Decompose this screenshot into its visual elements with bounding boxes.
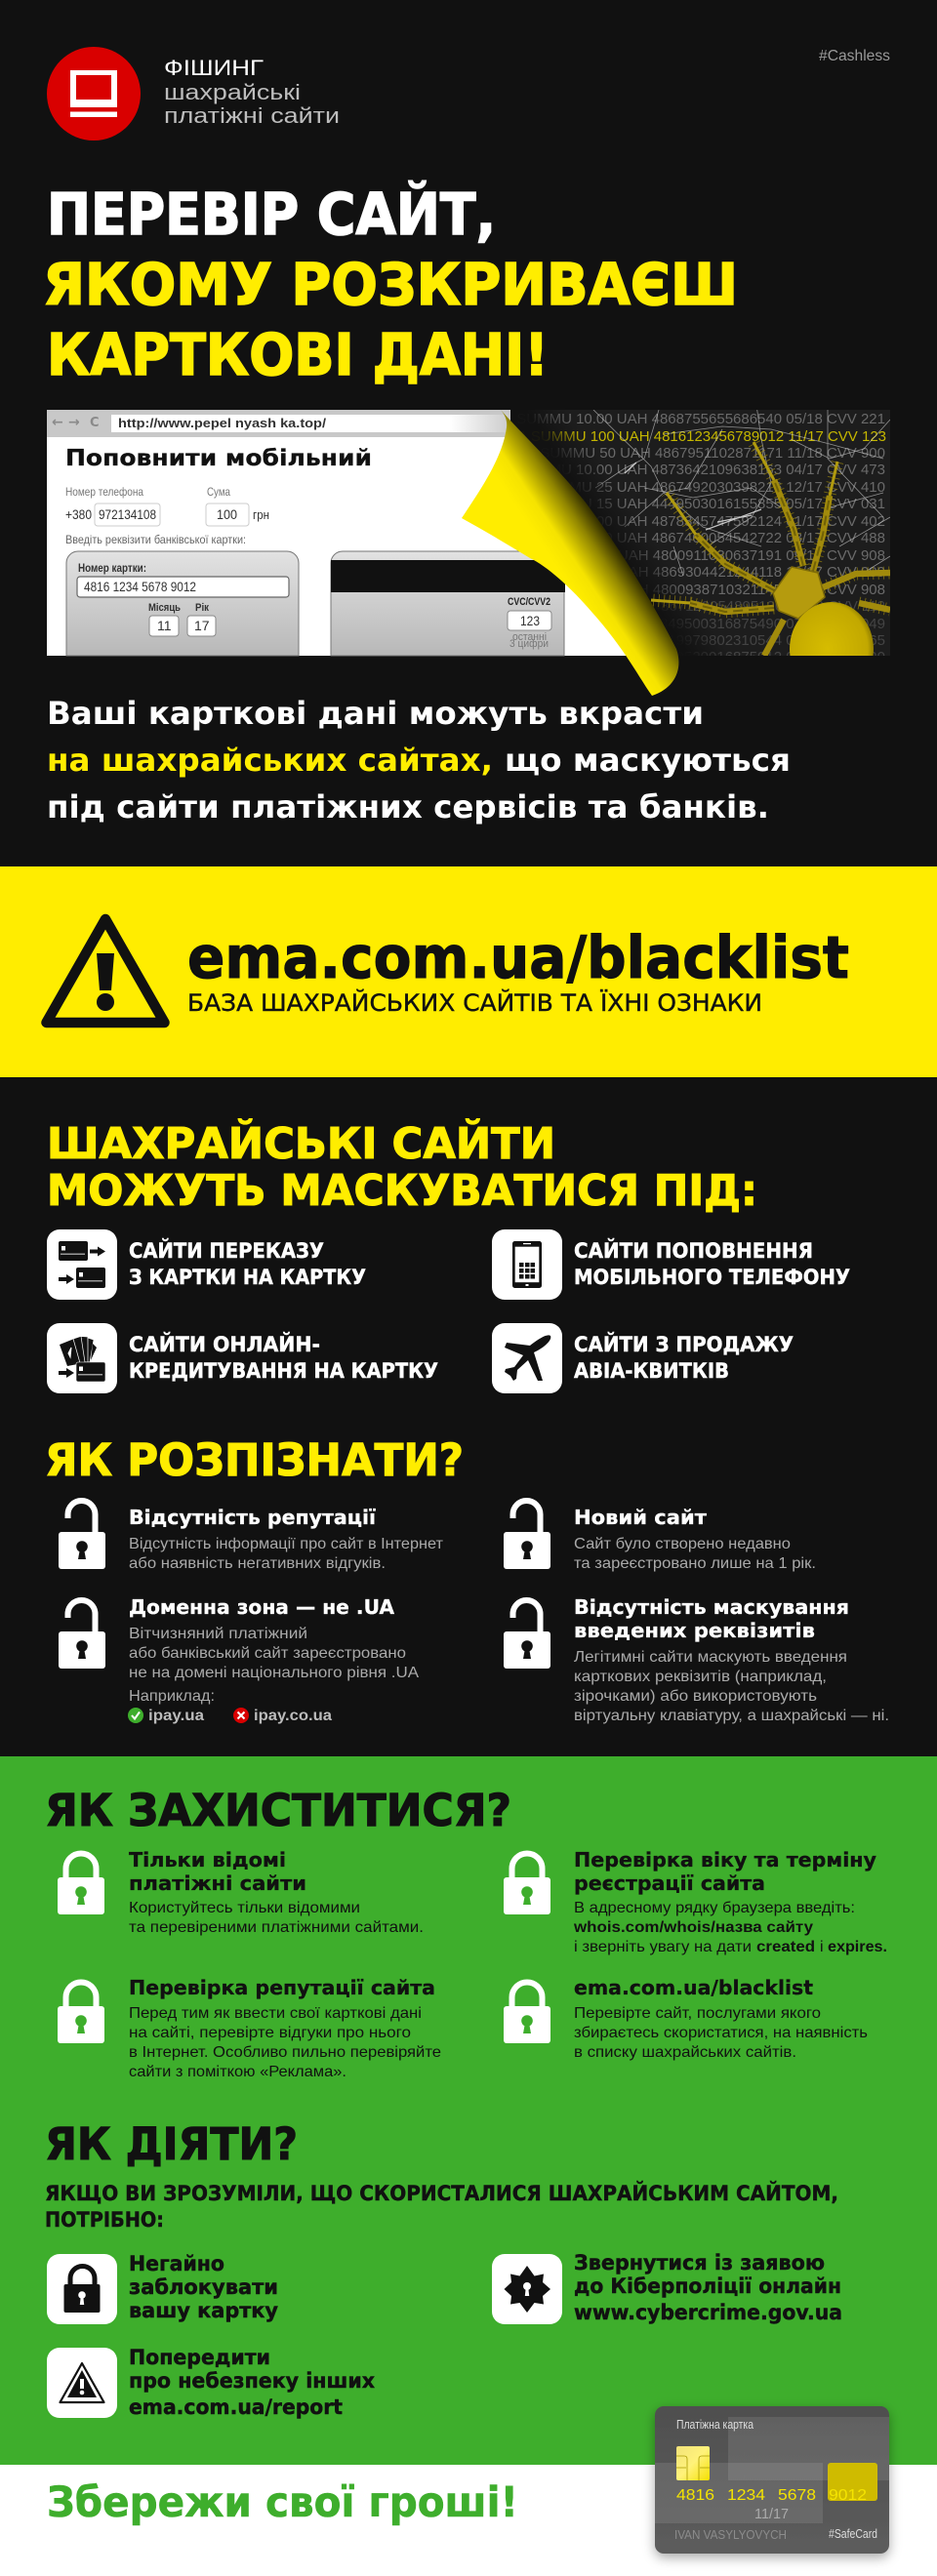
stolen card data rows: SUMMU 15 UAH 4800520016875012 04/18 CVV 190 — [537, 649, 885, 665]
phone and amount fields — [65, 485, 269, 546]
text — [574, 1595, 889, 1724]
item: mobile top-up sites — [492, 1229, 850, 1300]
item: warn others — [47, 2346, 375, 2419]
spider — [650, 440, 890, 656]
subheading: ПОТРІБНО: — [45, 2208, 164, 2232]
header label: ФІШИНГ — [164, 56, 264, 80]
text: введених реквізитів — [574, 1619, 815, 1642]
card front form: 11 — [157, 618, 172, 633]
illustration: payment card: #SafeCard — [829, 2526, 877, 2541]
stolen card data rows: SUMMU 10 UAH 4800938710321145 06/17 CVV 908 — [538, 582, 885, 598]
item: cyberpolice — [492, 2251, 842, 2324]
icon: card transfer — [47, 1229, 117, 1300]
text: Відсутність маскування — [574, 1595, 849, 1619]
card front form — [66, 551, 299, 656]
text: заблокувати — [129, 2275, 278, 2299]
item: check reputation — [58, 1976, 441, 2080]
label — [574, 1238, 850, 1289]
text — [574, 1976, 868, 2061]
phone and amount fields: Номер телефона — [65, 485, 143, 499]
stolen card data rows: PLATA SUMMU 50 UAH 4867951102871171 11/18 CVV 900 — [493, 445, 885, 462]
text: сайти з поміткою «Реклама». — [129, 2064, 346, 2080]
yellow page curl — [462, 410, 678, 696]
card front form: Номер картки: — [78, 561, 146, 575]
label: САЙТИ ПЕРЕКАЗУ — [129, 1238, 324, 1263]
icon: cash fan and card — [47, 1323, 117, 1393]
panel: green section — [0, 1756, 937, 2465]
text: Попередити — [129, 2346, 270, 2369]
phone and amount fields: +380 — [65, 506, 92, 522]
text: Перевірка репутації сайта — [129, 1976, 435, 1999]
text: збираєтесь скористатися, на наявність — [574, 2025, 868, 2041]
fake site page — [47, 410, 649, 656]
text: та перевіреними платіжними сайтами. — [129, 1919, 424, 1936]
example: good domain — [128, 1708, 204, 1724]
icon: open lock — [59, 1600, 105, 1669]
browser bar: C — [90, 416, 100, 430]
text: в списку шахрайських сайтів. — [574, 2044, 796, 2061]
text: Перед тим як ввести свої карткові дані — [129, 2005, 422, 2022]
text: в Інтернет. Особливо пильно перевіряйте — [129, 2044, 441, 2061]
text: Користуйтесь тільки відомими — [129, 1900, 360, 1916]
phone and amount fields: Введіть реквізити банківської картки: — [65, 533, 246, 546]
illustration: payment card: 11/17 — [754, 2506, 789, 2522]
text — [129, 1848, 424, 1936]
text: Звернутися із заявою — [574, 2251, 825, 2274]
text: ema.com.ua/report — [129, 2395, 343, 2419]
header — [47, 47, 890, 141]
text: до Кіберполіції онлайн — [574, 2274, 841, 2298]
stolen card data rows: PLATA SUMMU 10.00 UAH 4868755655686540 05/18 CVV 221 — [469, 411, 885, 427]
card front form: 4816 1234 5678 9012 — [84, 579, 196, 594]
browser bar — [47, 410, 510, 437]
stolen card data rows: SUMMU 20 UAH 4867400054542722 08/17 CVV 488 — [537, 530, 885, 546]
item: online credit sites — [47, 1323, 438, 1393]
text: whois.com/whois/назва сайту — [573, 1919, 813, 1936]
label — [574, 1332, 794, 1383]
title: КАРТКОВІ ДАНІ! — [47, 321, 549, 388]
text: created — [756, 1939, 815, 1955]
stolen card data rows: PLATA SUMMU 100 UAH 4816123456789012 11/17 CVV 123 — [483, 428, 886, 445]
card back form — [331, 551, 565, 656]
text — [129, 1976, 441, 2080]
phone and amount fields: грн — [253, 507, 269, 522]
card back form: 123 — [520, 613, 540, 628]
card back form: останні — [512, 631, 547, 643]
text — [574, 1506, 816, 1572]
banner url: ema.com.ua/blacklist — [187, 924, 849, 992]
icon: open lock — [504, 1501, 550, 1569]
spider web — [593, 405, 890, 576]
text: Перевірка віку та терміну — [574, 1848, 876, 1872]
card front form: Рік — [195, 602, 209, 614]
text: вашу картку — [129, 2299, 278, 2322]
panel: yellow blacklist banner — [0, 866, 937, 1077]
text: та зареєстровано лише на 1 рік. — [574, 1555, 816, 1572]
panel: white footer — [0, 2465, 937, 2576]
intro paragraph: Ваші карткові дані можуть вкрасти — [47, 695, 704, 732]
card back form: CVC/CVV2 — [508, 596, 550, 608]
stolen card data rows: SUMMU 10.00 UAH 4873642109638163 04/17 CVV 473 — [516, 462, 885, 478]
banner subtitle: БАЗА ШАХРАЙСЬКИХ САЙТІВ ТА ЇХНІ ОЗНАКИ — [187, 988, 762, 1017]
item: air ticket sites — [492, 1323, 794, 1393]
icon: open lock — [504, 1600, 550, 1669]
label — [129, 1332, 438, 1383]
label: АВІА-КВИТКІВ — [574, 1359, 729, 1383]
text: зірочками) або використовують — [574, 1688, 817, 1705]
stolen card data rows: SUMMU 30 UAH 4800911030637191 09/17 CVV 908 — [538, 547, 885, 564]
example: bad domain: ipay.co.ua — [254, 1708, 332, 1724]
subheading — [45, 2181, 838, 2232]
phone and amount fields: 100 — [217, 506, 237, 522]
item: new site — [504, 1501, 816, 1572]
heading: what to do: ЯК ДІЯТИ? — [45, 2118, 298, 2170]
icon: warning triangle — [47, 2348, 117, 2418]
text: віртуальну клавіатуру, а шахрайські — ні. — [574, 1708, 889, 1724]
footer slogan: Збережи свої гроші! — [47, 2478, 518, 2527]
item: transfer sites — [47, 1229, 366, 1300]
stolen card data rows — [522, 413, 886, 656]
hologram — [828, 2463, 877, 2501]
stolen card data rows: SUMMU 30 UAH 4819979802310544 03/18 CVV 865 — [537, 632, 885, 649]
label: САЙТИ З ПРОДАЖУ — [574, 1332, 794, 1356]
text: Тільки відомі — [129, 1848, 286, 1872]
intro paragraph: під сайти платіжних сервісів та банків. — [47, 788, 769, 825]
text: Новий сайт — [574, 1506, 707, 1529]
text — [129, 1506, 444, 1572]
stolen card data rows: SUMMU 25 UAH 4867492030398216 12/17 CVV 410 — [537, 479, 885, 496]
text: на сайті, перевірте відгуки про нього — [129, 2025, 411, 2041]
text: Доменна зона — не .UA — [129, 1595, 395, 1619]
label: САЙТИ ОНЛАЙН- — [129, 1332, 320, 1356]
icon: red logo with monitor — [47, 47, 141, 141]
text — [129, 2252, 278, 2322]
header label: платіжні сайти — [164, 103, 340, 128]
text: Наприклад: — [129, 1688, 215, 1705]
heading: how to protect: ЯК ЗАХИСТИТИСЯ? — [45, 1785, 511, 1836]
stolen card data rows: SUMMU 400 UAH 4878345747592124 01/17 CVV 402 — [529, 513, 885, 530]
label: САЙТИ ПОПОВНЕННЯ — [574, 1238, 813, 1263]
card number: 4816 — [676, 2487, 714, 2504]
icon: open lock — [59, 1501, 105, 1569]
text: expires. — [828, 1939, 887, 1955]
card front form: Місяць — [148, 602, 181, 614]
text: В адресному рядку браузера введіть: — [574, 1900, 855, 1916]
text: про небезпеку інших — [129, 2369, 375, 2393]
icon: plane — [492, 1323, 562, 1393]
heading: how to recognise: ЯК РОЗПІЗНАТИ? — [45, 1434, 464, 1486]
title: ПЕРЕВІР САЙТ, — [47, 181, 496, 248]
text — [573, 1848, 887, 1955]
text: і зверніть увагу на дати — [574, 1939, 752, 1955]
stolen card data rows: SUMMU 15 UAH 4449503016155855 05/17 CVV 031 — [537, 496, 885, 512]
icon: closed lock — [58, 1854, 104, 1914]
phone and amount fields: 972134108 — [99, 506, 156, 522]
title — [43, 181, 738, 388]
heading: masquerade: МОЖУТЬ МАСКУВАТИСЯ ПІД: — [47, 1166, 757, 1216]
header label: шахрайські — [164, 80, 301, 104]
chip — [676, 2446, 710, 2480]
browser bar: ← — [52, 415, 63, 430]
label — [129, 1238, 366, 1289]
label: МОБІЛЬНОГО ТЕЛЕФОНУ — [574, 1266, 850, 1289]
form heading: Поповнити мобільний — [65, 446, 372, 471]
text: ema.com.ua/blacklist — [574, 1976, 813, 1999]
intro paragraph — [47, 695, 791, 825]
item: no masking — [504, 1595, 889, 1724]
intro paragraph: що маскуються — [505, 742, 791, 779]
card front form: 17 — [194, 618, 210, 633]
text: реєстрації сайта — [574, 1872, 765, 1895]
header label — [164, 56, 340, 128]
item: check age — [504, 1848, 887, 1955]
card number: 1234 — [727, 2487, 765, 2504]
text: і — [820, 1939, 824, 1955]
icon: black lock — [47, 2254, 117, 2324]
intro paragraph: на шахрайських сайтах, — [47, 742, 493, 779]
text — [574, 2251, 842, 2324]
item: block card — [47, 2252, 278, 2324]
icon: phone — [492, 1229, 562, 1300]
text: карткових реквізитів (наприклад, — [574, 1669, 827, 1685]
text: Легітимні сайти маскують введення — [574, 1649, 847, 1666]
text: Відсутність інформації про сайт в Інтернет — [129, 1536, 444, 1552]
label: З КАРТКИ НА КАРТКУ — [129, 1266, 366, 1289]
text — [129, 2346, 375, 2419]
item: blacklist check — [504, 1976, 868, 2061]
item: no reputation — [59, 1501, 444, 1572]
icon: police star — [492, 2254, 562, 2324]
card number: 5678 — [778, 2487, 816, 2504]
item: domain zone — [59, 1595, 419, 1724]
example: good domain: ipay.ua — [148, 1708, 204, 1724]
illustration: phishing site with page curl and spider — [47, 405, 890, 696]
card back form: 3 цифри — [509, 638, 549, 650]
stolen card data rows: SUMMU 10 UAH 4849500316875490 07/17 CVV 049 — [537, 616, 885, 632]
phone and amount fields: Сума — [207, 485, 230, 499]
heading: masquerade — [47, 1117, 757, 1216]
browser bar: http://www.pepel nyash ka.top/ — [118, 416, 326, 430]
illustration: payment card — [655, 2406, 889, 2554]
card number — [676, 2487, 867, 2504]
title: ЯКОМУ РОЗКРИВАЄШ — [43, 251, 738, 318]
text: www.cybercrime.gov.ua — [574, 2301, 842, 2324]
text: Перевірте сайт, послугами якого — [574, 2005, 821, 2022]
stolen card data rows: SUMMU 50 UAH 4867120054895120 02/18 CVV 112 — [538, 598, 885, 615]
text: Відсутність репутації — [129, 1506, 376, 1529]
hashtag: #Cashless — [819, 48, 890, 64]
item: known sites — [58, 1848, 424, 1936]
illustration: payment card: Платіжна картка — [676, 2417, 754, 2432]
fade beside curl — [510, 410, 722, 656]
browser bar: → — [68, 415, 80, 430]
icon: closed lock — [504, 1983, 550, 2043]
illustration: payment card: IVAN VASYLYOVYCH — [674, 2527, 787, 2542]
text: або наявність негативних відгуків. — [129, 1555, 386, 1572]
subheading: ЯКЩО ВИ ЗРОЗУМІЛИ, ЩО СКОРИСТАЛИСЯ ШАХРАЙСЬКИМ САЙТОМ, — [45, 2181, 838, 2205]
icon: warning triangle — [47, 919, 164, 1023]
text — [129, 1595, 419, 1705]
text: платіжні сайти — [129, 1872, 306, 1895]
stolen card data rows: SUMMU 20 UAH 4869304421244118 10/17 CVV 909 — [538, 564, 885, 581]
card number: 9012 — [829, 2487, 867, 2504]
text: не на домені національного рівня .UA — [129, 1665, 419, 1681]
text: Вітчизняний платіжний — [129, 1626, 307, 1642]
text: Негайно — [129, 2252, 224, 2275]
icon: closed lock — [504, 1854, 550, 1914]
heading: masquerade: ШАХРАЙСЬКІ САЙТИ — [47, 1117, 555, 1169]
text: або банківський сайт зареєстровано — [129, 1645, 406, 1662]
text: Сайт було створено недавно — [574, 1536, 791, 1552]
icon: closed lock — [58, 1983, 104, 2043]
label: КРЕДИТУВАННЯ НА КАРТКУ — [129, 1359, 438, 1383]
